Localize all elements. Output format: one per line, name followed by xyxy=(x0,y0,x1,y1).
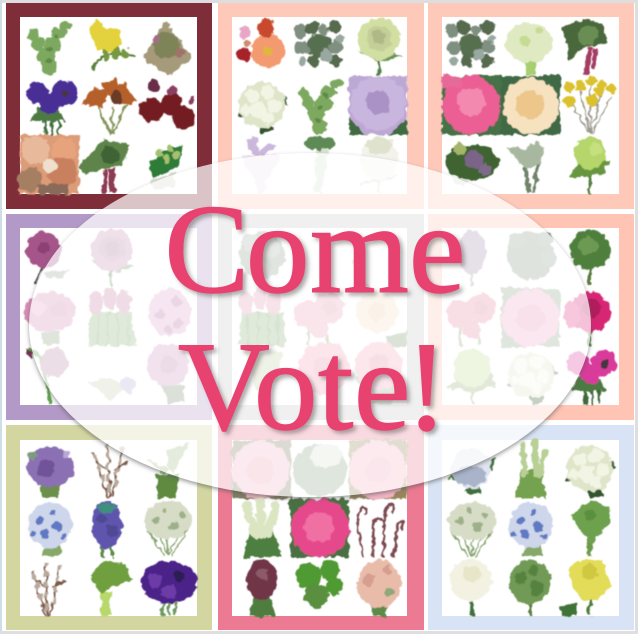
flower: succulents xyxy=(445,20,496,67)
panel: rose flower grid xyxy=(218,425,424,630)
flower: mauve chrysanthemum xyxy=(26,232,70,284)
flower: pale green airy bunch xyxy=(505,23,553,75)
panel: maroon flower grid xyxy=(6,3,212,209)
flower: white hydrangea xyxy=(238,82,288,134)
flower: pink ranunculus xyxy=(294,293,344,346)
flower: white hydrangea xyxy=(507,352,557,404)
panel: grey flower grid xyxy=(218,214,424,420)
flower: mauve rose xyxy=(90,229,136,286)
flower: green maroon amaranth xyxy=(562,19,608,75)
flower: green bells xyxy=(298,80,343,134)
flower: green bush xyxy=(509,560,551,616)
flower: green fern xyxy=(146,442,190,498)
flower: green ball xyxy=(570,230,610,286)
flower: purple stock xyxy=(27,447,73,498)
flower: brown green tuft xyxy=(142,21,192,75)
flower: white blue hydrangea xyxy=(448,448,496,496)
photo: orange protea cell xyxy=(18,135,79,194)
flower: pale green rose xyxy=(357,18,403,75)
title: Vote!: o xyxy=(254,317,318,457)
title: Come: C xyxy=(164,180,249,320)
photo: pink peony cell xyxy=(290,499,349,557)
flower: white rose xyxy=(450,559,492,616)
flower: pink carnation xyxy=(24,292,76,344)
flower: green bells xyxy=(28,21,73,75)
flower: purple anemones xyxy=(27,80,77,135)
flower: dark red cosmos xyxy=(140,80,196,130)
flower: maroon fiddlehead ferns xyxy=(358,505,403,557)
flower: green stems xyxy=(244,352,282,404)
flower: orange gerbera bunch xyxy=(237,19,285,68)
flower: magenta anemones xyxy=(567,350,617,405)
title: Vote!: t xyxy=(318,317,353,457)
flower: grey succulent xyxy=(239,232,285,278)
flower: pink calla xyxy=(24,348,68,403)
title: Come: m xyxy=(310,180,409,320)
flower: pale pink stock xyxy=(357,560,401,616)
photo: pale garden rose cell right xyxy=(349,440,407,499)
overlay: translucent white ellipse xyxy=(29,153,591,497)
panel: peach flower grid top middle xyxy=(218,3,424,209)
title: Come: o xyxy=(246,180,310,320)
flower: grey green stems xyxy=(507,141,545,193)
photo: lilac rose cell xyxy=(349,76,407,135)
flower: yellow rose xyxy=(560,560,612,616)
flower: white lilac orchid xyxy=(242,137,280,193)
flower: green bunch xyxy=(90,560,134,616)
flower: white snapdragon xyxy=(244,501,282,557)
flower: brown twigs xyxy=(32,563,66,616)
flower: orange calla lilies xyxy=(82,78,138,134)
panel: light blue flower grid xyxy=(428,425,634,630)
flower: ornamental kale xyxy=(445,143,499,187)
flower: green white stems xyxy=(515,442,547,498)
photo: peach rose cell xyxy=(501,76,560,135)
title: Vote!: e xyxy=(354,317,410,457)
flower: gypsophila xyxy=(448,502,496,557)
flower: gypsophila xyxy=(144,501,192,556)
flower: cream ranunculus xyxy=(356,291,407,346)
flower: burgundy astilbe xyxy=(247,560,277,616)
flower: blue delphinium xyxy=(28,502,72,556)
flower: pink orchids xyxy=(149,288,191,336)
flower: grey succulent cluster xyxy=(507,232,557,280)
flower: white hydrangea xyxy=(566,446,616,498)
flower: blue delphinium xyxy=(509,502,553,556)
flower: pink mum xyxy=(147,344,189,403)
panel: purple flower grid xyxy=(6,214,212,420)
flower: green bouquet xyxy=(305,136,335,193)
flower: deep purple violets xyxy=(141,561,197,616)
flower: grey succulents xyxy=(293,20,344,67)
title: Vote!: V xyxy=(178,317,270,457)
flower: pink tulips xyxy=(238,287,286,346)
title: Come: e xyxy=(409,180,465,320)
panel: peach flower grid top right xyxy=(428,3,634,209)
photo: pale pink rose cell xyxy=(501,288,560,347)
photo: pale garden rose cell left xyxy=(232,440,291,499)
flower: magenta rose xyxy=(564,292,610,346)
flower: lime hydrangea xyxy=(568,137,610,193)
flower: yellow freesia xyxy=(88,20,136,70)
flower: pink rose xyxy=(355,342,403,404)
flower: pussy willow xyxy=(94,445,128,498)
panel: olive flower grid xyxy=(6,425,212,630)
flower: green bunch xyxy=(572,501,610,557)
flower: pale stem xyxy=(354,255,372,290)
flower: green white hydrangea xyxy=(293,444,347,496)
overlay shadow rim xyxy=(29,153,591,497)
flower: yellow craspedia xyxy=(563,76,617,134)
flower: white green hydrangea xyxy=(446,349,496,404)
flower: white rose xyxy=(360,137,398,193)
photo: pink peony cell xyxy=(442,76,501,135)
flower: purple blue spike xyxy=(92,501,122,557)
flower: pink ranunculus xyxy=(446,293,496,346)
panel: salmon flower grid xyxy=(428,214,634,420)
flower: green button balls xyxy=(295,560,343,608)
flower: green maroon amaranth xyxy=(80,139,130,193)
flower: mauve bush xyxy=(458,230,486,286)
flower: pink garden rose xyxy=(298,342,350,404)
flower: pink tulips xyxy=(88,287,136,346)
flower: pale freesia xyxy=(86,377,136,401)
flower: green hypericum xyxy=(150,144,182,191)
title: Vote!: ! xyxy=(406,317,448,457)
